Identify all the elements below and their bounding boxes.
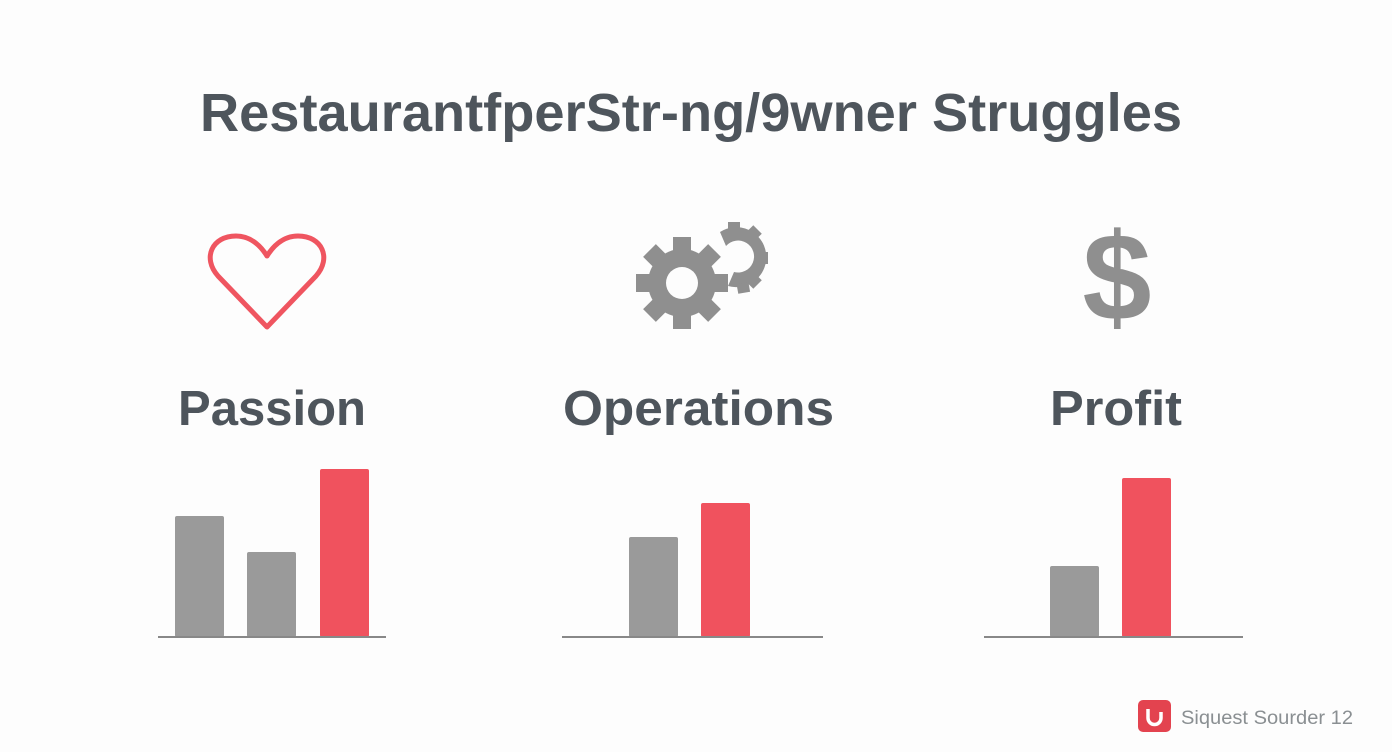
bar chart: passion: [158, 469, 386, 637]
panel: operations: [562, 218, 834, 637]
panel: passion: [158, 236, 386, 637]
panel: profit: [984, 209, 1243, 637]
heading: Profit: Profit: [1050, 382, 1182, 436]
heading: Passion: Passion: [178, 382, 366, 436]
title: Restaurant⁠fperStr-ng/9wner Struggles: [200, 83, 1182, 143]
bar chart: operations: [562, 503, 823, 637]
logo: Siquest Sourder 12: [1181, 708, 1353, 729]
bar chart: profit: [984, 478, 1243, 637]
icon: gears: [617, 218, 768, 348]
icon: dollar: $: [1083, 209, 1151, 347]
logo: [1138, 700, 1353, 732]
heading: Operations: Operations: [563, 382, 834, 436]
icon: heart: [210, 236, 324, 327]
